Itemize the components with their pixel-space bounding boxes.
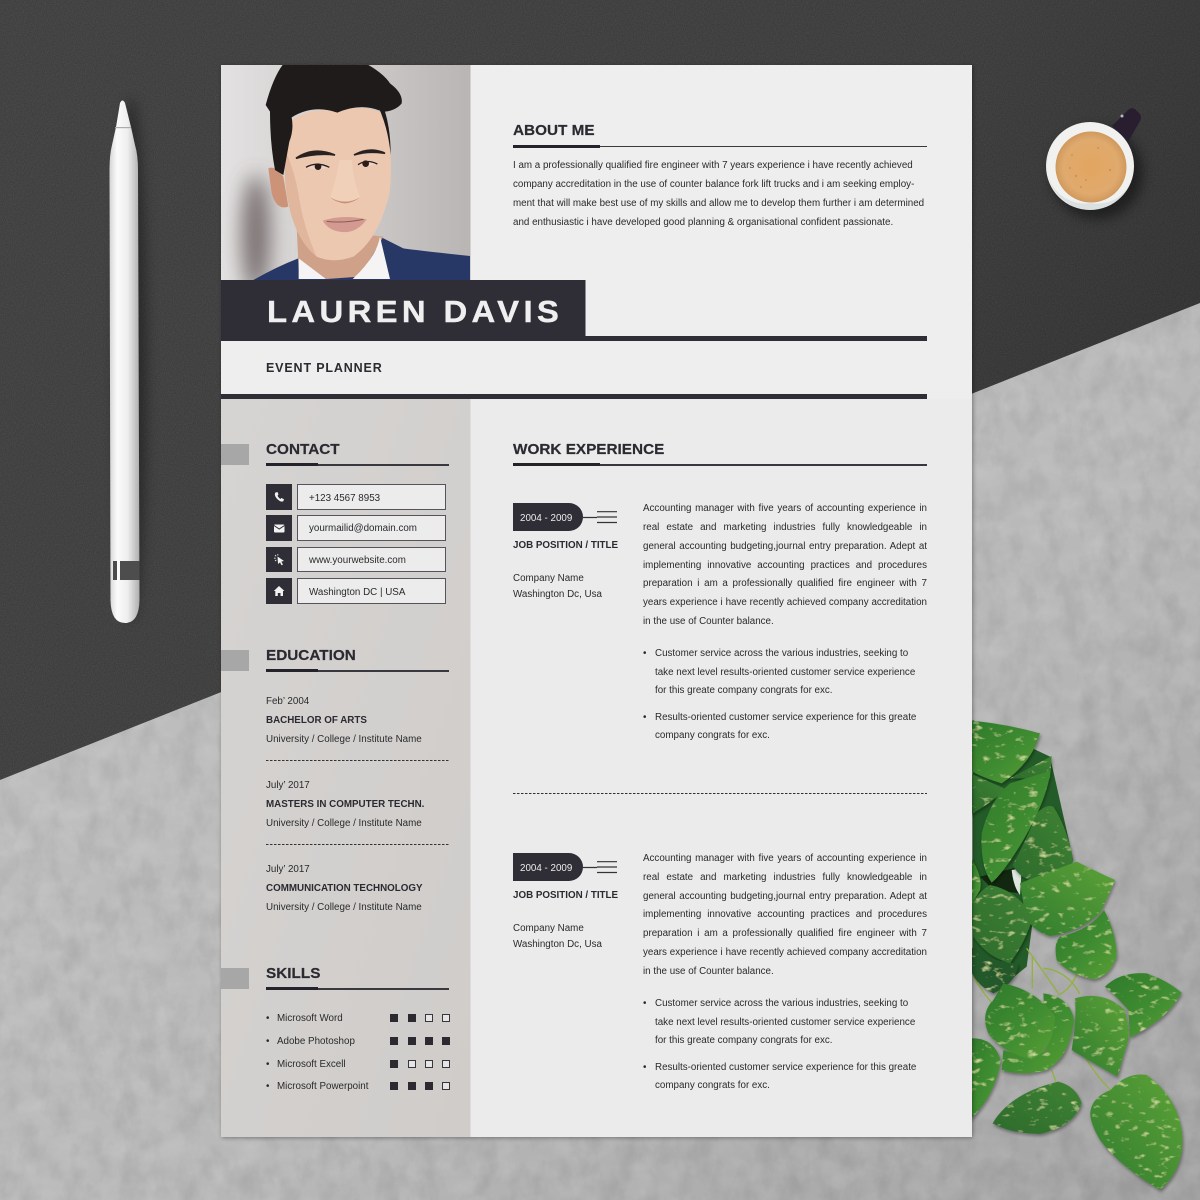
job description: implementing innovative accounting practices and procedures (643, 909, 927, 920)
job description (643, 503, 927, 627)
name rule (221, 336, 927, 341)
bullet list (643, 998, 916, 1090)
bullet list: • (643, 1062, 646, 1072)
job description: general accounting budgeting,journal entry preparation. Adept at (643, 541, 927, 552)
icon: green plant (970, 720, 1182, 1190)
education entry 3 (266, 864, 423, 913)
about me paragraph (513, 160, 924, 228)
skill: adobe photoshop (266, 1036, 450, 1047)
education entry 3: University / College / Institute Name (266, 902, 422, 913)
about me paragraph: ment that will make best use of my skills and allow me to develop them further i am determined (513, 198, 924, 209)
job title: JOB POSITION / TITLE (513, 890, 618, 900)
heading: work experience (512, 441, 927, 466)
icon: coffee cup (1046, 108, 1143, 219)
skill: microsoft word: Microsoft Word (277, 1013, 343, 1024)
date pill (513, 853, 617, 881)
about me paragraph: company accreditation in the use of counter balance fork lift trucks and i am seeking employ- (513, 179, 914, 190)
date pill: 2004 - 2009 (520, 862, 572, 874)
bullet list: company congrats for exc. (655, 730, 770, 741)
portrait photo (221, 64, 471, 295)
company details: Company Name (513, 922, 584, 934)
skill: microsoft word: • (266, 1013, 269, 1024)
company details: Washington Dc, Usa (513, 938, 602, 950)
heading: about me: ABOUT ME (513, 122, 595, 138)
panel: education (221, 646, 449, 913)
contact row: phone: +123 4567 8953 (309, 492, 380, 504)
panel: skills (221, 964, 450, 1092)
skill: microsoft powerpoint: • (266, 1081, 269, 1092)
education entry 1 (266, 696, 422, 745)
bullet list: Customer service across the various industries, seeking to (655, 998, 908, 1008)
resume paper (221, 65, 973, 1138)
skill: microsoft excel: • (266, 1059, 269, 1070)
panel: contact (221, 441, 449, 604)
education entry 1: Feb’ 2004 (266, 696, 309, 707)
heading: work experience: WORK EXPERIENCE (513, 441, 664, 458)
left sidebar panel (221, 399, 470, 1137)
job description (643, 852, 927, 976)
skill: microsoft word (266, 1013, 450, 1024)
name band (221, 280, 586, 341)
job description: Accounting manager with five years of accounting experience in (643, 852, 927, 864)
bullet list: • (643, 712, 646, 723)
job description: implementing innovative accounting practices and procedures (643, 560, 927, 570)
company details (513, 573, 602, 600)
bullet list: Customer service across the various industries, seeking to (655, 648, 908, 659)
skill: microsoft powerpoint (266, 1081, 450, 1092)
skill: adobe photoshop: • (266, 1036, 269, 1047)
skill: microsoft excel (266, 1059, 450, 1070)
date pill (513, 503, 617, 531)
about me paragraph: and enthusiastic i have developed good planning & organisational confident passionate. (513, 217, 893, 228)
education entry 2 (266, 780, 424, 829)
bullet list: for this greate company congrats for exc. (655, 1034, 833, 1046)
job title: JOB POSITION / TITLE (513, 540, 618, 551)
icon: white stylus pencil (110, 98, 147, 623)
bullet list (643, 648, 916, 741)
job description: preparation i am a professionally qualified fire engineer with 7 (643, 578, 927, 589)
education entry 1: BACHELOR OF ARTS (266, 715, 367, 726)
job description: years experience i have recently achieved company accreditation (643, 597, 927, 608)
job description: in the use of Counter balance. (643, 616, 774, 627)
job description: real estate and marketing industries fully knowledgeable in (643, 872, 927, 882)
education entry 2: University / College / Institute Name (266, 818, 422, 829)
heading: education: EDUCATION (266, 646, 356, 664)
education entry 3: July’ 2017 (266, 864, 310, 875)
job description: real estate and marketing industries fully knowledgeable in (643, 522, 927, 533)
bullet list: take next level results-oriented customer service experience (655, 667, 915, 678)
panel: job entry 2 (513, 852, 927, 1090)
contact row: website: www.yourwebsite.com (309, 555, 406, 566)
contact row: phone (266, 484, 446, 510)
heading: contact: CONTACT (266, 441, 340, 458)
skill: adobe photoshop: Adobe Photoshop (277, 1036, 355, 1047)
company details (513, 922, 602, 950)
contact row: email (266, 515, 446, 541)
name: LAUREN DAVIS (266, 294, 563, 329)
job description: in the use of Counter balance. (643, 966, 774, 976)
bullet list: Results-oriented customer service experience for this greate (655, 712, 916, 723)
company details: Washington Dc, Usa (513, 589, 602, 600)
contact row: email: yourmailid@domain.com (309, 523, 417, 534)
bullet list: for this greate company congrats for exc. (655, 685, 833, 696)
heading: skills: SKILLS (266, 964, 320, 982)
job title: EVENT PLANNER (266, 361, 383, 375)
job description: preparation i am a professionally qualified fire engineer with 7 (643, 928, 927, 938)
bullet list: take next level results-oriented customer service experience (655, 1016, 915, 1028)
panel: job entry 1 (513, 503, 927, 741)
job description: Accounting manager with five years of accounting experience in (643, 503, 927, 514)
contact row: website (266, 547, 446, 572)
bullet list: company congrats for exc. (655, 1080, 770, 1090)
concrete surface (0, 300, 1200, 1200)
education entry 2: July’ 2017 (266, 780, 310, 791)
contact row: address: Washington DC | USA (309, 586, 405, 598)
job description: general accounting budgeting,journal entry preparation. Adept at (643, 890, 927, 902)
skill: microsoft powerpoint: Microsoft Powerpoint (277, 1081, 368, 1092)
education entry 3: COMMUNICATION TECHNOLOGY (266, 883, 423, 894)
panel: about me (513, 122, 927, 228)
job description: years experience i have recently achieved company accreditation (643, 946, 927, 958)
bullet list: • (643, 648, 646, 659)
section divider bar (221, 394, 927, 399)
company details: Company Name (513, 573, 584, 584)
skill: microsoft excel: Microsoft Excell (277, 1059, 346, 1070)
about me paragraph: I am a professionally qualified fire engineer with 7 years experience i have recently achieved (513, 160, 913, 171)
education entry 2: MASTERS IN COMPUTER TECHN. (266, 799, 424, 810)
contact row: address (266, 578, 446, 604)
education entry 1: University / College / Institute Name (266, 734, 422, 745)
bullet list: • (643, 998, 646, 1008)
bullet list: Results-oriented customer service experience for this greate (655, 1062, 916, 1072)
date pill: 2004 - 2009 (520, 513, 572, 524)
